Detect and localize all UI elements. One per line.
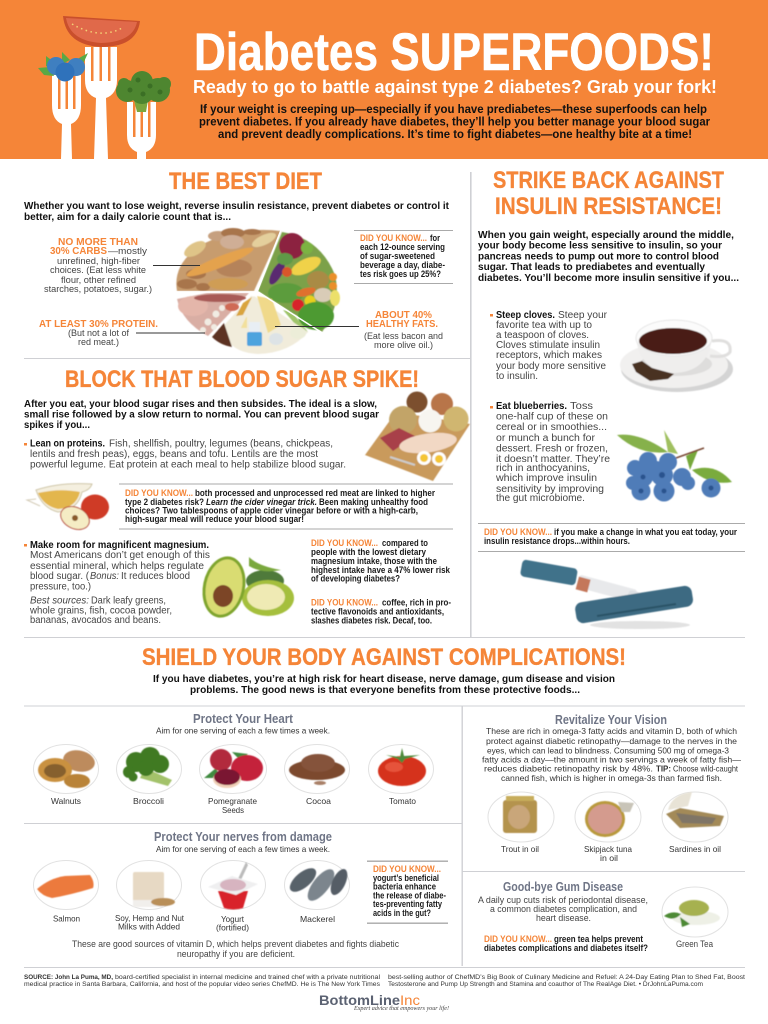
food: fortified milks: Milks with Added [118, 922, 180, 932]
insulin intro text [478, 230, 739, 284]
food: fortified milks [115, 860, 185, 932]
did you know: yogurt: DID YOU KNOW... [373, 864, 441, 874]
did you know: within hours: insulin resistance drops...within hours. [484, 536, 630, 546]
did you know: sugary beverages [354, 230, 453, 284]
gum disease text: a common diabetes complication, and [490, 904, 637, 914]
did you know: magnesium: highest intake have a 47% lower risk [311, 565, 450, 575]
bullet: eat blueberries: cereal or in smoothies... [496, 422, 607, 433]
bullet: steep cloves: receptors, which makes [496, 350, 602, 361]
spike intro text [24, 399, 379, 431]
icon: avocado [197, 552, 294, 622]
bullet: magnesium: Dark leafy greens, [91, 596, 166, 606]
bullet: magnesium [24, 540, 210, 626]
callout: carbs: 30% CARBS [50, 245, 107, 257]
callout: carbs: unrefined, high-fiber [57, 256, 140, 266]
bullet: eat blueberries: Toss [570, 401, 593, 412]
vision body text: reduces diabetic retinopathy risk by 48%. [484, 764, 653, 774]
bullet: steep cloves: Steep your [558, 310, 608, 321]
callout: healthy fats: more olive oil.) [374, 340, 433, 350]
callout: healthy fats: (Eat less bacon and [364, 331, 443, 341]
did you know: red meat and vinegar: choices? Two tablespoons of apple cider vinegar before or with a high-carb, [125, 506, 418, 516]
food: tomato: Tomato [389, 797, 416, 806]
food: trout in oil [488, 792, 554, 854]
food: salmon [34, 860, 98, 924]
icon: blueberries [617, 430, 732, 502]
header banner [0, 0, 768, 159]
did you know: yogurt: tes-preventing fatty [373, 899, 442, 909]
bullet: magnesium: Make room for magnificent magnesium. [30, 540, 209, 551]
did you know: red meat and vinegar: Been making unhealthy food [319, 497, 428, 507]
callout: protein: red meat.) [78, 337, 119, 347]
did you know: coffee: tective flavonoids and antioxidants, [311, 606, 444, 616]
did you know: yogurt: bacteria enhance [373, 882, 436, 892]
diet intro text: better, aim for a daily calorie count that is... [24, 212, 231, 223]
did you know: magnesium: DID YOU KNOW... [311, 538, 378, 548]
callout: carbs: starches, potatoes, sugar.) [44, 284, 152, 294]
insulin intro text: diabetes. You’ll become more insulin sensitive if you... [478, 273, 739, 284]
bullet: steep cloves: favorite tea with up to [496, 320, 592, 331]
vision body text: protect against diabetic retinopathy—damage to the nerves in the [486, 737, 737, 746]
did you know: red meat and vinegar [119, 484, 453, 530]
bullet: steep cloves: your body more sensitive [496, 361, 606, 372]
logo: Bottom Line Inc: Expert advice that empowers your life! [353, 1005, 449, 1012]
icon: cup of tea with cloves [620, 320, 733, 392]
callout: healthy fats: HEALTHY FATS. [366, 318, 438, 330]
subheading: Protect Your Heart [193, 712, 294, 726]
vision body text: Choose wild-caught [673, 764, 739, 774]
food: skipjack tuna in oil: in oil [600, 854, 618, 863]
did you know: yogurt [367, 860, 448, 924]
vitamin D note [72, 939, 399, 959]
did you know: coffee [311, 598, 451, 626]
did you know: red meat and vinegar: high-sugar meal will reduce your blood sugar! [125, 514, 304, 524]
heading: THE BEST DIET [169, 168, 322, 195]
food: walnuts: Walnuts [51, 797, 81, 806]
did you know: coffee: DID YOU KNOW... [311, 598, 378, 608]
subheading: Protect Your nerves from damage [154, 830, 332, 844]
vision body text: TIP: [656, 764, 671, 774]
did you know: sugary beverages: for [430, 233, 440, 243]
bullet: magnesium: Best sources: [30, 596, 89, 606]
did you know: yogurt: yogurt’s beneficial [373, 873, 439, 883]
intro text: prevent diabetes. If you already have diabetes, they’ll help you better manage your blood sugar [199, 114, 710, 128]
vision body text: These are rich in omega-3 fatty acids and vitamin D, both of which [486, 727, 737, 736]
bullet: eat blueberries: or munch a bunch for [496, 433, 596, 444]
panel: the best diet [24, 168, 453, 354]
did you know: red meat and vinegar: DID YOU KNOW... [125, 488, 193, 498]
vision body text: canned fish, which is higher in omega-3s than farmed fish. [501, 774, 722, 783]
food: sardines in oil: Sardines in oil [669, 845, 721, 854]
section: protect your nerves [34, 830, 448, 959]
did you know: green tea [484, 934, 648, 953]
bullet: lean on proteins: powerful legume. Eat protein at each meal to help stabilize blood sugar. [30, 460, 346, 470]
callout: carbs: —mostly [108, 246, 148, 256]
bullet: steep cloves: Steep cloves. [496, 310, 555, 321]
callout: carbs: choices. (Eat less white [50, 265, 146, 275]
panel: strike back against insulin resistance [478, 167, 745, 629]
gum disease text [478, 895, 648, 923]
bullet: eat blueberries: one-half cup of these on [496, 412, 608, 422]
food: skipjack tuna in oil [575, 792, 641, 863]
source credit: board-certified specialist in internal medicine and trained chef with a private nutritional [115, 974, 381, 981]
icon: forks with tomato, blueberries and broccoli [38, 16, 171, 159]
did you know: sugary beverages: each 12-ounce serving [360, 242, 445, 252]
did you know: magnesium: compared to [382, 538, 429, 548]
bullet: magnesium: Most Americans don’t get enough of this [30, 550, 210, 561]
source credit: Testosterone and Pump Up Strength and Stamina and coauthor of The RealAge Diet. • DrJohnLaPuma.com [388, 981, 704, 988]
did you know: magnesium: people with the lowest dietary [311, 547, 426, 557]
panel: shield your body against complications [34, 644, 742, 959]
did you know: sugary beverages: of sugar-sweetened [360, 251, 435, 261]
food: broccoli [116, 744, 182, 806]
subheading: Good-bye Gum Disease [503, 880, 623, 894]
food: skipjack tuna in oil: Skipjack tuna [584, 845, 632, 854]
icon: cider vinegar and apple [27, 484, 109, 534]
insulin intro text: pancreas needs to pump out more to control blood [478, 252, 719, 262]
source credit: best-selling author of ChefMD’s Big Book of Culinary Medicine and Refuel: A 24-Day Eating Plan to Shed Fat, Boost [388, 974, 745, 981]
bullet: steep cloves: to insulin. [496, 371, 538, 382]
did you know: sugary beverages: DID YOU KNOW... [360, 233, 427, 243]
source credit: SOURCE: John La Puma, MD, [24, 974, 113, 981]
food: yogurt: (fortified) [216, 924, 249, 932]
logo: Bottom Line Inc: Inc [400, 992, 420, 1008]
food: mackerel [284, 860, 351, 924]
spike intro text: After you eat, your blood sugar rises and then subsides. The ideal is a slow, [24, 399, 377, 410]
food: broccoli: Broccoli [133, 797, 164, 806]
bullet: eat blueberries: sensitivity by improving [496, 484, 604, 495]
insulin intro text: your body become less sensitive to insulin, so your [478, 240, 722, 252]
intro text [199, 102, 710, 141]
did you know: magnesium: magnesium intake, those with the [311, 556, 437, 566]
did you know: green tea: DID YOU KNOW... [484, 934, 552, 944]
callout: protein [39, 318, 205, 347]
food: walnuts [34, 744, 98, 806]
serving note: Aim for one serving of each a few times a week. [156, 845, 330, 854]
heading [493, 167, 724, 220]
food: yogurt [200, 860, 266, 932]
bullet: eat blueberries: dessert. Fresh or frozen, [496, 444, 608, 454]
bullet: magnesium: whole grains, fish, cocoa powder, [29, 606, 172, 616]
bullet: steep cloves [490, 310, 608, 382]
intro text: and prevent deadly complications. It’s time to fight diabetes—one healthy bite at a time! [218, 127, 692, 141]
did you know: sugary beverages: beverage a day, diabe- [360, 260, 445, 270]
bullet: lean on proteins: Fish, shellfish, poultry, legumes (beans, chickpeas, [109, 438, 333, 450]
food: cocoa: Cocoa [306, 797, 331, 806]
bullet: eat blueberries: it doesn’t matter. They’re [496, 454, 610, 465]
did you know: coffee: coffee, rich in pro- [382, 598, 451, 608]
icon: protein foods on cutting board [365, 392, 470, 481]
food: mackerel: Mackerel [300, 915, 335, 924]
bullet: magnesium: pressure, too.) [30, 582, 91, 592]
gum disease text: heart disease. [536, 913, 591, 923]
bullet: magnesium: Bonus: [90, 571, 119, 582]
spike intro text: spikes if you... [24, 420, 90, 431]
bullet: lean on proteins: Lean on proteins. [30, 438, 105, 450]
food: fortified milks: Soy, Hemp and Nut [115, 914, 185, 923]
food: yogurt: Yogurt [221, 915, 245, 924]
callout: protein: AT LEAST 30% PROTEIN. [39, 318, 158, 330]
did you know: red meat and vinegar: type 2 diabetes risk? [125, 497, 204, 507]
callout: protein: (But not a lot of [68, 328, 129, 338]
vitamin D note: neuropathy if you are deficient. [177, 949, 295, 959]
layout dividers [24, 172, 745, 968]
diet intro text: Whether you want to lose weight, reverse insulin resistance, prevent diabetes or control it [24, 201, 450, 212]
food: salmon: Salmon [53, 914, 80, 924]
section: protect your heart [34, 712, 434, 815]
food: pomegranate seeds [200, 744, 266, 815]
logo: Bottom Line Inc: BottomLine [319, 992, 400, 1008]
callout: healthy fats: ABOUT 40% [375, 309, 433, 321]
intro text: If your weight is creeping up—especially if you have prediabetes—these superfoods can help [200, 102, 707, 116]
gum disease text: A daily cup cuts risk of periodontal disease, [478, 895, 648, 905]
bullet: magnesium: essential mineral, which helps regulate [30, 561, 204, 572]
did you know: red meat and vinegar: both processed and unprocessed red meat are linked to higher [195, 488, 436, 498]
food: pomegranate seeds: Seeds [222, 806, 244, 815]
subheading: Revitalize Your Vision [555, 713, 667, 727]
callout: healthy fats [275, 309, 443, 350]
callout: carbs: NO MORE THAN [58, 236, 138, 248]
did you know: within hours: DID YOU KNOW... [484, 527, 552, 537]
bullet: eat blueberries: the gut microbiome. [496, 493, 585, 504]
section: good-bye gum disease [478, 880, 728, 953]
logo: Bottom Line Inc [319, 992, 449, 1012]
spike intro text: small rise followed by a slow return to normal. You can prevent blood sugar [24, 410, 379, 420]
vision body text: eyes, which can lead to blindness. Consuming 500 mg of omega-3 [487, 746, 729, 756]
food: green tea: Green Tea [676, 939, 713, 949]
bullet: lean on proteins [24, 438, 346, 470]
bullet: lean on proteins: lentils and fresh peas), eggs, beans and tofu. Lentils are the most [30, 449, 318, 460]
did you know: sugary beverages: tes risk goes up 25%? [360, 269, 441, 279]
food: sardines in oil [662, 792, 728, 854]
did you know: yogurt: acids in the gut? [373, 908, 431, 918]
did you know: green tea: diabetes complications and diabetes itself? [484, 943, 648, 953]
heading: INSULIN RESISTANCE! [495, 193, 722, 220]
callout: carbs: flour, other refined [61, 275, 136, 285]
insulin intro text: sugar. That leads to prediabetes and eventually [478, 262, 706, 273]
did you know: yogurt: the release of diabe- [373, 890, 446, 900]
bullet: eat blueberries: rich in anthocyanins, [496, 463, 590, 474]
bullet: magnesium: bananas, avocados and beans. [30, 615, 161, 626]
source credit: medical practice in Santa Barbara, California, and host of the popular video series ChefMD. He is The New York Times [24, 981, 381, 988]
serving note: Aim for one serving of each a few times a week. [156, 726, 330, 736]
did you know: green tea: green tea helps prevent [554, 934, 643, 944]
did you know: red meat and vinegar: Learn the cider vinegar trick. [206, 497, 317, 507]
callout: carbs [44, 236, 200, 294]
bullet: eat blueberries: which improve insulin [495, 473, 597, 484]
heading: BLOCK THAT BLOOD SUGAR SPIKE! [65, 366, 419, 393]
vision body text: fatty acids a day—the amount in two servings a week of fatty fish— [482, 756, 742, 764]
food: pomegranate seeds: Pomegranate [208, 797, 257, 806]
insulin intro text: When you gain weight, especially around the middle, [478, 230, 734, 241]
food pie chart [176, 228, 340, 354]
shield intro text: problems. The good news is that everyone benefits from these protective foods... [190, 685, 580, 696]
bullet: magnesium: It reduces blood [121, 571, 190, 582]
did you know: magnesium: of developing diabetes? [311, 574, 400, 584]
heading: SHIELD YOUR BODY AGAINST COMPLICATIONS! [142, 644, 626, 671]
bullet: steep cloves: Cloves stimulate insulin [496, 340, 600, 351]
bullet: eat blueberries: Eat blueberries. [496, 401, 567, 412]
shield intro text [153, 674, 615, 696]
did you know: coffee: slashes diabetes risk. Decaf, too. [311, 616, 432, 626]
food: tomato [368, 744, 434, 806]
subtitle: Ready to go to battle against type 2 diabetes? Grab your fork! [193, 76, 717, 97]
panel: block that blood sugar spike [24, 366, 470, 626]
icon: insulin pen [520, 559, 694, 629]
source credit [24, 974, 745, 988]
section: revitalize your vision [482, 713, 742, 863]
diet intro text [24, 201, 450, 223]
food: trout in oil: Trout in oil [501, 845, 539, 854]
bullet: magnesium: blood sugar. ( [30, 571, 90, 582]
did you know: within hours [478, 523, 745, 552]
food: cocoa [284, 744, 350, 806]
shield intro text: If you have diabetes, you’re at high risk for heart disease, nerve damage, gum disease and vision [153, 674, 615, 685]
vitamin D note: These are good sources of vitamin D, which helps prevent diabetes and fights diabetic [72, 939, 399, 949]
did you know: magnesium [311, 538, 450, 584]
did you know: within hours: if you make a change in what you eat today, your [554, 527, 738, 537]
vision body text [482, 727, 742, 783]
bullet: eat blueberries [490, 401, 610, 504]
bullet: steep cloves: a teaspoon of cloves. [496, 330, 589, 341]
food: green tea [662, 887, 728, 949]
